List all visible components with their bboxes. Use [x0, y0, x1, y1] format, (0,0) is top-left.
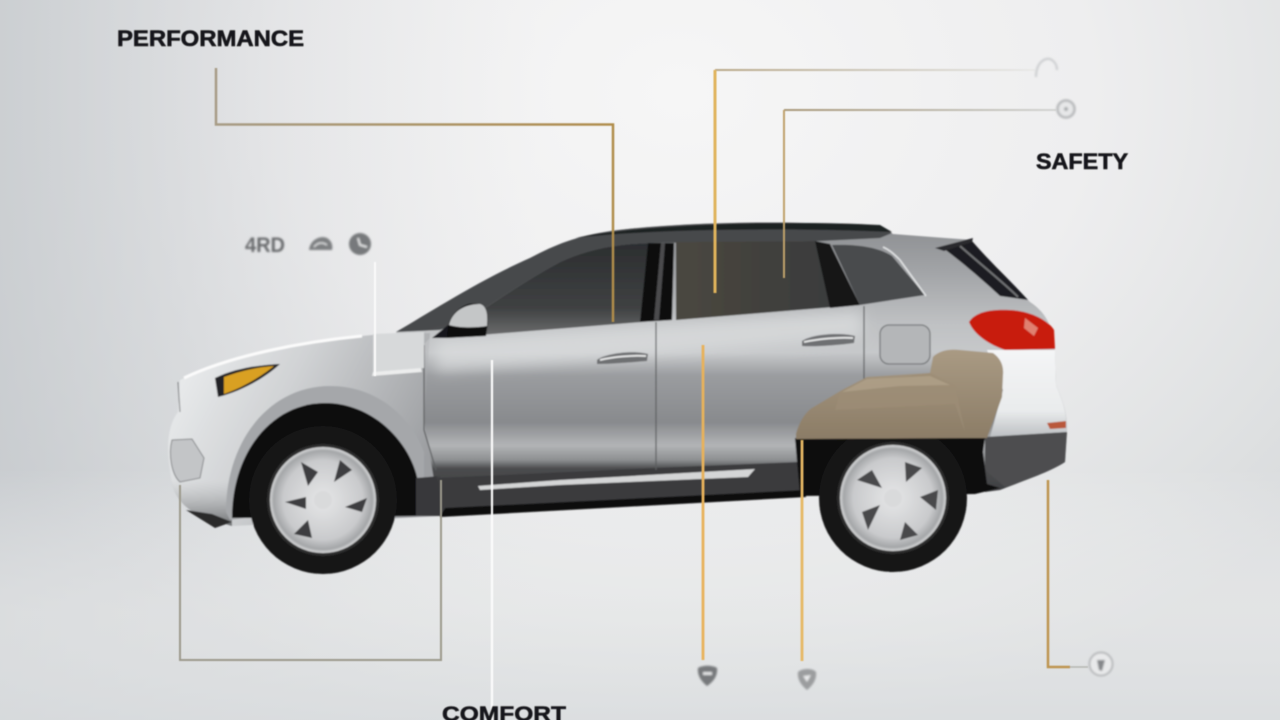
spoiler [935, 238, 973, 251]
icon: 4RD badge: 4RD [245, 234, 285, 257]
rear corner panel [987, 350, 1067, 437]
headlight [215, 364, 280, 397]
icon: gauge lower right [1090, 652, 1112, 676]
icon: target, top right [1058, 100, 1074, 118]
line: top safety a [715, 70, 1035, 293]
line: top safety b [784, 110, 1056, 278]
line: seat to lower icon [801, 440, 803, 661]
lower front lip [186, 510, 232, 528]
fender trim [373, 332, 424, 372]
line: door to lower icon [702, 345, 704, 660]
icon: gauge [309, 237, 332, 250]
highlights on door [436, 310, 862, 372]
icon: arc, top right [1036, 59, 1057, 77]
side trim strip [478, 469, 755, 490]
callout lines [180, 68, 1088, 720]
lower sill behind front arch [416, 476, 440, 516]
lower cladding [438, 462, 805, 516]
rear wheel [819, 424, 967, 572]
heading: safety: SAFETY [1036, 149, 1128, 174]
icon: shield 2 [798, 669, 816, 690]
door seams [424, 306, 864, 470]
window surround highlight [883, 247, 926, 296]
seat overlay [796, 350, 1003, 439]
icon: shield 1 [698, 666, 717, 686]
rear mud guard [795, 438, 1000, 496]
line: rear to lower icon [1048, 480, 1088, 667]
line: white comfort [491, 360, 493, 720]
roof and a-pillar dark band [396, 223, 892, 332]
spokes cut-outs [857, 462, 938, 540]
fog lamp [170, 439, 204, 482]
fender flare [226, 386, 424, 520]
bumper lower shade [171, 480, 232, 526]
middle window [676, 241, 858, 320]
bonnet crease [184, 336, 362, 378]
rear quarter window [832, 245, 925, 305]
car illustration [168, 223, 1067, 574]
tail light [969, 310, 1055, 350]
c pillar [815, 241, 860, 308]
side mirror [432, 304, 488, 338]
spokes cut-outs [285, 460, 367, 538]
front bumper and fender [168, 333, 440, 526]
roof rail highlight [575, 223, 892, 238]
front door panel [423, 320, 656, 490]
icon: dial [349, 233, 371, 255]
front wheel [249, 426, 397, 574]
rear hatch glass [943, 241, 1028, 300]
rear marker [1047, 421, 1066, 429]
line: front lower bracket [180, 480, 441, 660]
door handles [597, 334, 855, 364]
line: performance [216, 68, 613, 322]
front side window [470, 243, 650, 335]
b pillar [640, 243, 674, 322]
car body [396, 223, 1067, 516]
heading: performance: PERFORMANCE [117, 26, 304, 51]
fuel door [880, 325, 930, 364]
icon group: performance [245, 233, 371, 257]
line: white fender [374, 262, 376, 376]
front wheel arch [232, 403, 418, 518]
